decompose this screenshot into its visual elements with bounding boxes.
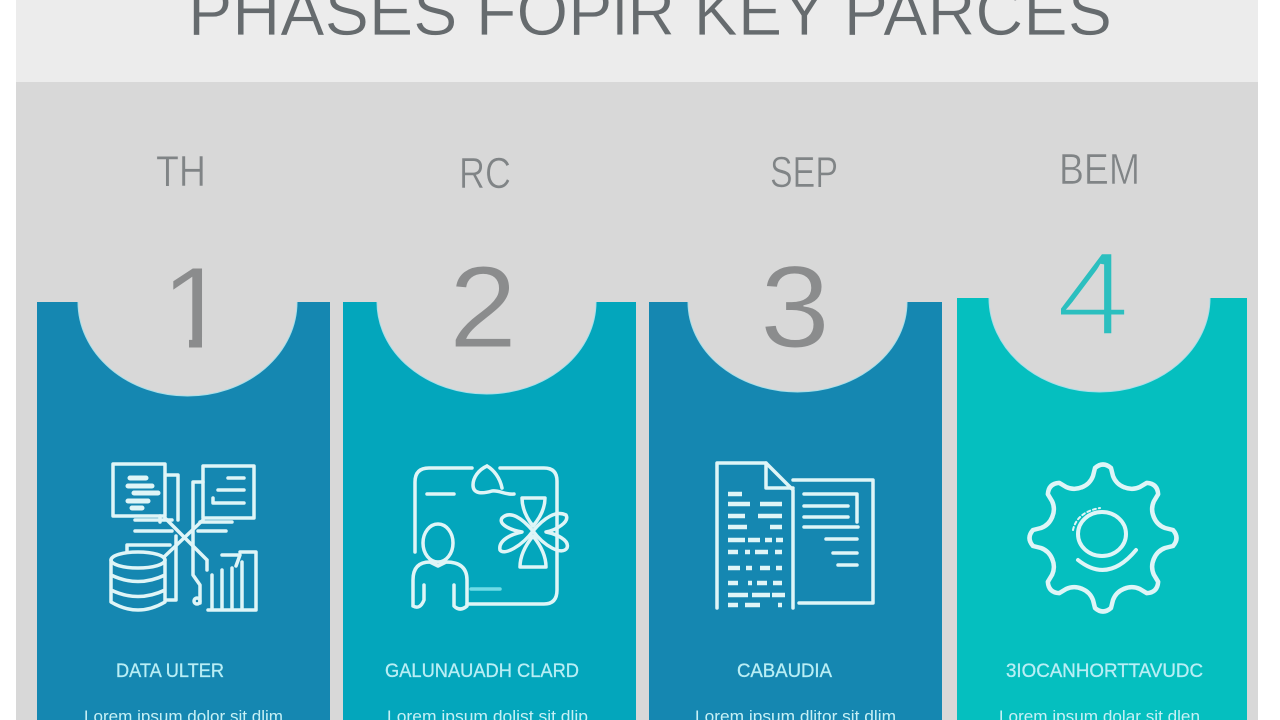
phase 1 heading: TH	[156, 147, 206, 196]
phase 3 number: 3	[760, 242, 830, 372]
phase 4 column	[957, 145, 1247, 720]
phase 4 label: 3IOCANHORTTAVUDC	[1006, 661, 1203, 682]
phase 3 column	[649, 148, 942, 720]
phase 3 label: CABAUDIA	[737, 661, 832, 682]
phase 2 heading: RC	[459, 149, 511, 198]
phase 1 label: DATA ULTER	[116, 661, 224, 682]
icon: person and puzzle	[413, 466, 567, 609]
phase 2 number: 2	[449, 242, 517, 372]
phase 4 card	[957, 298, 1247, 720]
phase 4 heading: BEM	[1059, 145, 1140, 194]
icon: documents	[717, 463, 873, 608]
phase 1 number: 1	[161, 243, 229, 373]
icon: gear	[1030, 464, 1176, 612]
phase 3 heading: SEP	[770, 148, 838, 197]
icon: data sources	[111, 464, 256, 610]
phase 4 number: 4	[1056, 227, 1130, 361]
phase 2 column	[343, 149, 636, 720]
phase 3 card	[649, 302, 942, 720]
header panel	[16, 0, 1258, 82]
phase 1 column	[37, 147, 330, 720]
phase 2 card	[343, 302, 636, 720]
phase 2 label: GALUNAUADH CLARD	[385, 661, 579, 682]
phase 1 card	[37, 302, 330, 720]
